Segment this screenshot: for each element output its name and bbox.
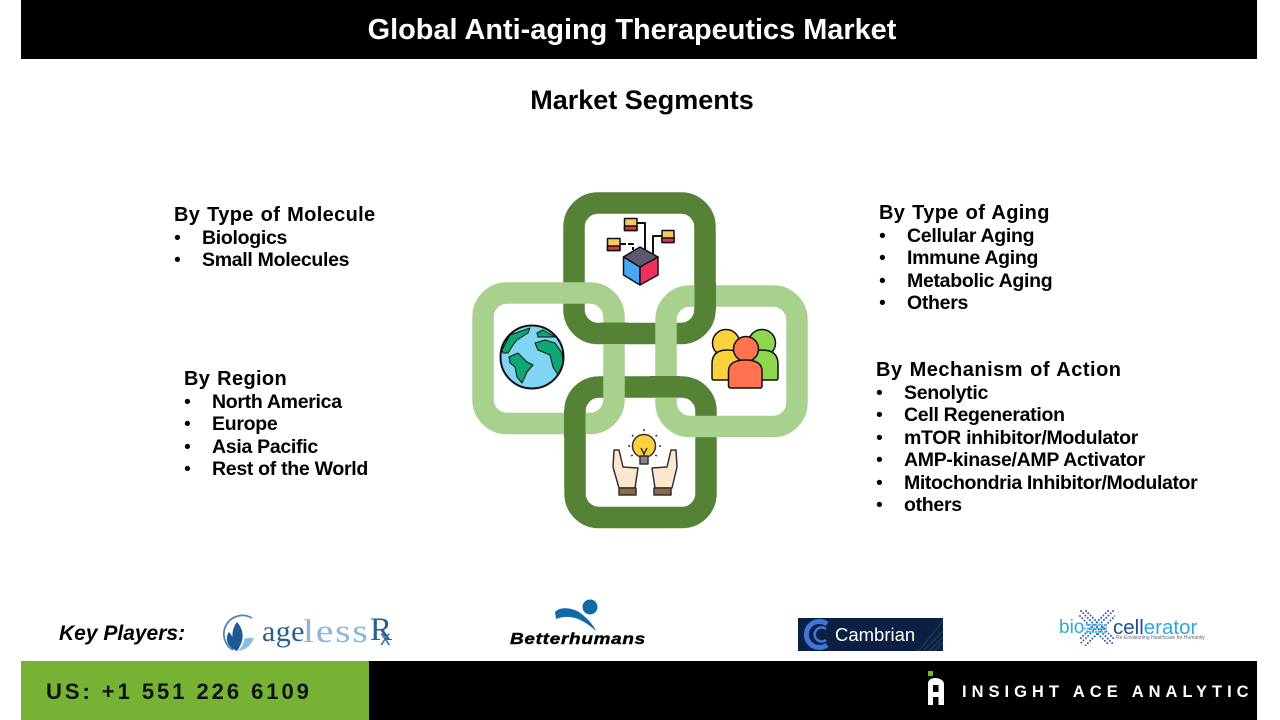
segment: by region	[184, 368, 368, 480]
icon: group of people	[712, 330, 778, 388]
logo: cambrian: Cambrian	[835, 624, 915, 645]
ring: left light green	[483, 293, 614, 424]
segment: by type of molecule: By Type of Molecule	[174, 204, 376, 226]
logo: agelessRx: age	[262, 615, 305, 648]
segment: by region: By Region	[184, 368, 287, 390]
ring: right light green	[666, 296, 797, 426]
segment: by type of aging: Cellular Aging	[907, 225, 1034, 247]
segment: by mechanism of action: Cell Regeneration	[904, 404, 1065, 426]
footer bar	[21, 661, 1257, 720]
logo: agelessRx: less	[303, 614, 370, 650]
logo: bioxcellerator: Re-Envisioning Healthcare for Humanity	[1116, 635, 1205, 641]
segment: by mechanism of action: Mitochondria Inhibitor/Modulator	[904, 472, 1197, 494]
logo: agelessRx: R	[370, 612, 392, 648]
brand name: INSIGHT ACE ANALYTIC	[962, 683, 1254, 701]
phone number panel: US: +1 551 226 6109	[46, 679, 312, 704]
ring: bottom dark green	[575, 387, 706, 518]
ring overlaps: dark links passing over light links	[564, 282, 716, 438]
title banner	[21, 0, 1257, 59]
segment: by type of molecule	[174, 204, 376, 271]
segment: by mechanism of action	[876, 359, 1198, 516]
logo: betterhumans: Betterhumans	[510, 631, 646, 648]
icon: molecule cube	[608, 218, 674, 285]
icon: globe	[500, 326, 564, 388]
segment: by type of molecule: Biologics	[202, 227, 287, 249]
logo: bioxcellerator: cellerator	[1113, 616, 1197, 639]
segment: by mechanism of action: Senolytic	[904, 382, 988, 404]
segment: by mechanism of action: others	[904, 494, 962, 516]
segment: by type of aging: By Type of Aging	[879, 202, 1050, 224]
logo: agelessRx: x	[380, 627, 390, 650]
ring: top dark green	[574, 203, 705, 334]
logo: betterhumans	[510, 600, 646, 648]
segment: by mechanism of action: mTOR inhibitor/Modulator	[904, 427, 1138, 449]
segment: by region: Rest of the World	[212, 458, 368, 480]
segment: by region: Europe	[212, 413, 277, 435]
segment: by mechanism of action: AMP-kinase/AMP Activator	[904, 449, 1145, 471]
logo: cambrian	[798, 618, 943, 651]
segment: by mechanism of action: By Mechanism of Action	[876, 359, 1122, 381]
segment: by type of aging	[879, 202, 1052, 314]
icon: hands holding light bulb	[613, 429, 677, 495]
phone number panel	[21, 661, 369, 720]
segment: by type of aging: Immune Aging	[907, 247, 1038, 269]
heading: market segments: Market Segments	[530, 85, 754, 115]
segment: by region: Asia Pacific	[212, 436, 318, 458]
segment: by type of aging: Others	[907, 292, 968, 314]
title banner: Global Anti-aging Therapeutics Market	[368, 14, 896, 46]
logo: bioxcellerator: bio	[1059, 617, 1084, 638]
label: key players: Key Players:	[59, 622, 185, 645]
segment: by region: North America	[212, 391, 342, 413]
logo: agelessRx	[222, 612, 392, 651]
segment: by type of aging: Metabolic Aging	[907, 270, 1052, 292]
logo: bioxcellerator	[1059, 610, 1205, 646]
logo: insight ace mark	[928, 671, 944, 705]
segment: by type of molecule: Small Molecules	[202, 249, 349, 271]
